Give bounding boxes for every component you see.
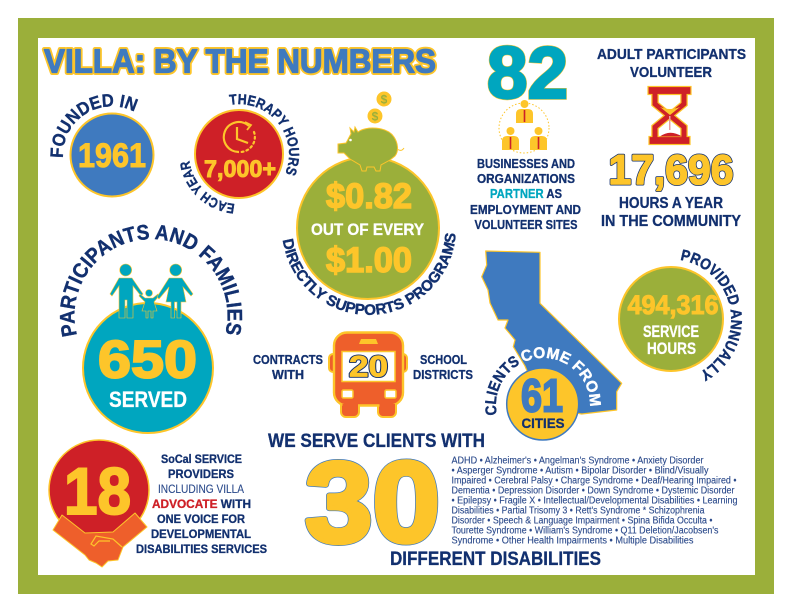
panel: adult volunteers: 17,696 bbox=[608, 146, 734, 193]
panel: participants and families bbox=[60, 224, 242, 434]
panel: adult volunteers: 17,696 bbox=[608, 146, 734, 193]
text block: advocates: DISABILITIES SERVICES bbox=[136, 542, 267, 556]
panel: service hours bbox=[618, 249, 742, 382]
panel: founded in: FOUNDED IN bbox=[50, 94, 138, 158]
title: VILLA: BY THE NUMBERS bbox=[44, 44, 436, 80]
panel: 30 disabilities: WE SERVE CLIENTS WITH bbox=[268, 430, 485, 452]
panel: 30 disabilities: 30 bbox=[305, 440, 440, 566]
text block: advocates: ADVOCATE WITH bbox=[152, 497, 251, 511]
panel: participants and families: 650 bbox=[98, 330, 197, 390]
text block: disabilities list: Dementia • Depression Disorder • Down Syndrome • Dystemic Disorder bbox=[452, 486, 735, 496]
panel: school district contracts: CONTRACTS bbox=[253, 352, 323, 367]
text block: disabilities list: • Epilepsy • Fragile X • Intellectual/Developmental Disabilities • Learning bbox=[452, 496, 738, 506]
text block: partners caption: VOLUNTEER SITES bbox=[474, 217, 578, 232]
icon: piggy bank bbox=[338, 127, 404, 171]
icon: coins: $ bbox=[372, 110, 379, 124]
panel: adult volunteers: ADULT PARTICIPANTS bbox=[597, 47, 746, 63]
panel: school district contracts: SCHOOL bbox=[420, 352, 467, 367]
panel: dollars to programs: DIRECTLY SUPPORTS PROGRAMS bbox=[282, 233, 456, 316]
text block: advocates: PROVIDERS bbox=[168, 467, 234, 481]
icon: school bus bbox=[329, 332, 407, 417]
panel: founded in: 1961 bbox=[78, 137, 146, 175]
text block: advocates: DEVELOPMENTAL bbox=[151, 527, 251, 541]
icon: clock bbox=[224, 122, 255, 152]
panel: 30 disabilities: DIFFERENT DISABILITIES bbox=[390, 549, 601, 570]
text block: disabilities list: ADHD • Alzheimer's • Angelman's Syndrome • Anxiety Disorder bbox=[452, 456, 704, 466]
panel: 18 service providers bbox=[49, 440, 267, 567]
panel: 82 partners: 82 bbox=[487, 33, 568, 114]
text block: partners caption: EMPLOYMENT AND bbox=[470, 202, 581, 217]
panel: adult volunteers bbox=[597, 47, 746, 230]
icon: school bus: 20 bbox=[349, 350, 388, 384]
panel: service hours: 494,316 bbox=[628, 290, 718, 320]
icon: handshake bbox=[53, 513, 147, 567]
icon: hourglass bbox=[648, 86, 691, 144]
panel: school district contracts: WITH bbox=[272, 367, 304, 382]
panel: therapy hours bbox=[180, 94, 300, 214]
panel: participants and families: SERVED bbox=[109, 387, 187, 412]
panel: dollars to programs: $1.00 bbox=[326, 241, 412, 280]
icon: coins: $ bbox=[381, 92, 388, 106]
panel: cities: CLIENTS bbox=[485, 356, 519, 416]
icon: school bus: 20 bbox=[349, 350, 388, 384]
panel: school district contracts bbox=[253, 332, 473, 417]
panel: founded in bbox=[50, 94, 154, 198]
panel: cities: 61 bbox=[521, 370, 563, 422]
text block: advocates: SoCal SERVICE bbox=[161, 452, 242, 466]
panel: dollars to programs: $0.82 bbox=[326, 177, 412, 216]
text block: partners caption bbox=[470, 156, 581, 232]
panel: therapy hours: 7,000+ bbox=[204, 156, 276, 183]
text block: partners caption: PARTNER AS bbox=[490, 186, 562, 201]
text block: partners caption: ORGANIZATIONS bbox=[477, 171, 575, 186]
text block: advocates bbox=[136, 452, 267, 556]
panel: cities: COME FROM bbox=[521, 347, 602, 406]
panel: 82 partners: 82 bbox=[487, 33, 568, 114]
text block: disabilities list: Syndrome • Other Health Impairments • Multiple Disabilities bbox=[452, 536, 694, 546]
text block: partners caption: BUSINESSES AND bbox=[477, 156, 575, 171]
icon: california map bbox=[482, 251, 622, 414]
text block: disabilities list: • Asperger Syndrome • Autism • Bipolar Disorder • Blind/Visually bbox=[452, 466, 709, 476]
text block: advocates: INCLUDING VILLA bbox=[158, 482, 244, 496]
text block: disabilities list bbox=[452, 456, 738, 546]
panel: cities: CITIES bbox=[522, 415, 564, 431]
panel: cities bbox=[481, 250, 622, 441]
panel: school district contracts: DISTRICTS bbox=[413, 367, 473, 382]
panel: service hours: PROVIDED ANNUALLY bbox=[680, 249, 742, 382]
title: VILLA: BY THE NUMBERS bbox=[44, 44, 436, 80]
panel: therapy hours: THERAPY HOURS bbox=[228, 94, 300, 176]
text block: advocates: ONE VOICE FOR bbox=[157, 512, 245, 526]
icon: family bbox=[110, 264, 193, 318]
panel: participants and families: PARTICIPANTS AND FAMILIES bbox=[60, 224, 242, 337]
panel: adult volunteers: VOLUNTEER bbox=[630, 65, 712, 81]
panel: dollars to programs bbox=[282, 92, 456, 316]
panel: service hours: SERVICE bbox=[643, 323, 699, 341]
panel: therapy hours: EACH YEAR bbox=[180, 160, 234, 214]
panel: 18 service providers: 18 bbox=[64, 454, 131, 528]
panel: 82 partners bbox=[470, 33, 581, 232]
panel: 30 disabilities: 30 bbox=[305, 440, 440, 566]
panel: dollars to programs: OUT OF EVERY bbox=[311, 221, 424, 239]
text block: disabilities list: Tourette Syndrome • William's Syndrome • Q11 Deletion/Jacobsen's bbox=[452, 526, 719, 536]
icon: people network bbox=[499, 100, 549, 153]
text block: disabilities list: Disorder • Speech & Language Impairment • Spina Bifida Occulta • bbox=[452, 516, 713, 526]
panel: service hours: HOURS bbox=[647, 340, 696, 358]
text block: disabilities list: Disabilities • Partial Trisomy 3 • Rett's Syndrome * Schizophrenia bbox=[452, 506, 705, 516]
panel: 30 disabilities bbox=[268, 430, 738, 570]
panel: adult volunteers: IN THE COMMUNITY bbox=[601, 213, 741, 230]
panel: adult volunteers: HOURS A YEAR bbox=[619, 195, 723, 212]
icon: coins bbox=[368, 92, 392, 124]
text block: disabilities list: Impaired • Cerebral Palsy • Charge Syndrome • Deaf/Hearing Impaired • bbox=[452, 476, 737, 486]
